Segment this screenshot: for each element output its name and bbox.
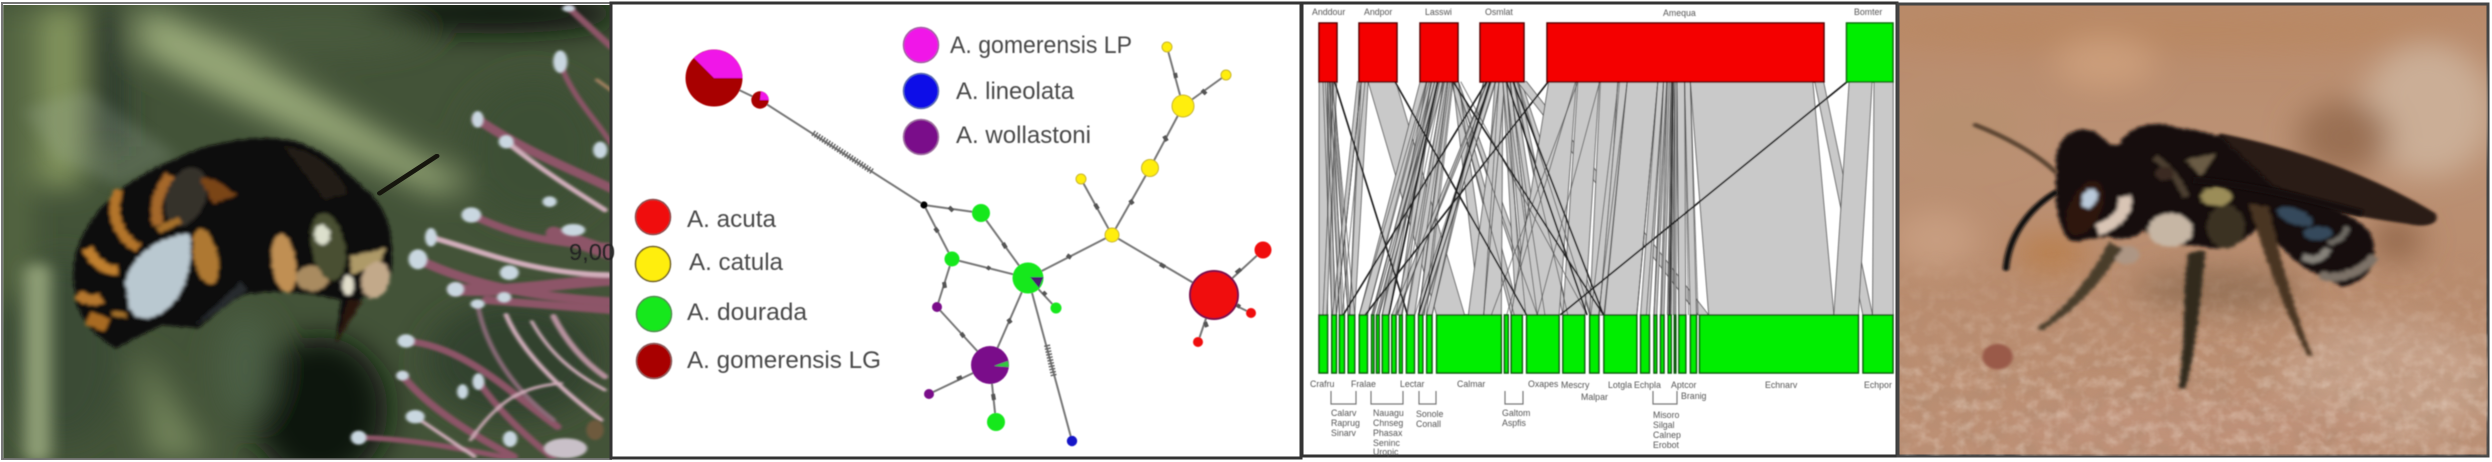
bottom labels: Chnseg [1373,418,1403,428]
nodes: A. catula [1076,42,1231,242]
interaction bands [1319,82,1893,315]
top plant/bee bars [1319,23,1893,82]
bottom labels: Echpor [1864,380,1892,390]
bottom labels: Aptcor [1671,380,1696,390]
bottom labels: Branig [1681,391,1707,401]
bottom labels: Uropic [1373,447,1399,457]
bottom labels: Calmar [1457,379,1485,389]
face [350,248,386,275]
bottom labels: Lectar [1400,379,1425,389]
grouping brackets [1331,391,1677,404]
legend: wollastoni [904,120,1091,154]
bottom labels: Galtom [1502,408,1530,418]
bottom labels: Malpar [1581,392,1608,402]
legend: gomerensis LG [636,344,881,378]
bottom labels: Seninc [1373,438,1400,448]
bee [2038,124,2375,388]
legend: catula [636,246,784,282]
bottom labels: Nauagu [1373,408,1404,418]
bottom labels: Raprug [1331,418,1360,428]
bottom labels: Lotgla [1608,380,1632,390]
bottom labels: Crafru [1310,379,1335,389]
photo background: blurred green foliage [3,0,621,462]
antenna [380,156,437,193]
photo background: blurred sandstone [1900,32,2488,456]
legend: gomerensis LG: A. gomerensis LG [687,347,881,374]
bottom labels: Oxapes [1528,379,1559,389]
top labels: Lasswi [1425,7,1452,17]
bottom labels: Conall [1416,419,1441,429]
bottom labels: Erobot [1653,440,1679,450]
legend: gomerensis LP: A. gomerensis LP [950,32,1132,59]
legend: acuta [636,200,777,234]
dark single-link lines [1334,82,1847,315]
bottom labels: Aspfis [1502,418,1527,428]
eye [306,211,350,282]
nodes: A. dourada [944,204,1062,431]
wing blur [24,90,178,187]
bottom labels: Echpla [1634,380,1661,390]
legend: catula: A. catula [689,249,784,276]
bottom labels: Sinarv [1331,428,1357,438]
legend: wollastoni: A. wollastoni [956,122,1091,149]
node: A. lineolata [1067,436,1077,446]
legend: acuta: A. acuta [687,206,777,233]
node: gomerensis large pie [686,50,742,106]
panel: flying bee photo [2,0,621,462]
top labels: Bomter [1854,7,1882,17]
node: junction [920,201,928,209]
top labels: Osmlat [1485,7,1513,17]
panel: haplotype network [611,3,1301,458]
bottom labels: Calnep [1653,430,1681,440]
panel: bee on rock photo [1852,4,2492,457]
legend: gomerensis LP [904,28,1132,62]
legend: lineolata [904,74,1075,108]
wing [2190,133,2437,226]
legend: dourada [636,296,808,332]
bottom labels: Silgal [1653,420,1675,430]
nodes: A. acuta [1190,242,1272,347]
top labels: Andpor [1364,7,1392,17]
network edges [714,47,1263,441]
node: gomerensis small pie [751,91,769,109]
legs [188,227,223,286]
nodes: A. wollastoni [924,302,942,399]
top labels [1312,7,1882,18]
legs [2038,242,2122,331]
bottom labels: Fralae [1351,379,1376,389]
top labels: Anddour [1312,7,1345,17]
hatched long branches [813,133,1054,377]
bottom labels: Mescry [1561,380,1590,390]
bottom labels: Echnarv [1765,380,1798,390]
panel: bipartite plant-pollinator web [1302,3,1897,457]
bottom labels: Calarv [1331,408,1357,418]
top labels: Amequa [1663,8,1696,18]
bottom labels: Misoro [1653,410,1680,420]
stray number label: 9,00 [569,239,615,265]
antennae [1975,125,2055,268]
wing vein [2193,180,2362,213]
flower filaments and anthers [359,8,611,458]
bottom labels [1310,379,1892,457]
bottom labels: Sonole [1416,409,1443,419]
legend: lineolata: A. lineolata [956,78,1075,105]
legend [636,28,1132,378]
mutation ticks [935,73,1241,400]
pollen load [126,233,191,318]
node: wollastoni pie [971,346,1009,384]
bottom species bars [1319,315,1893,373]
bee body [73,138,393,348]
bottom labels: Phasax [1373,428,1403,438]
legend: dourada: A. dourada [687,299,808,326]
node: dourada pie [1012,262,1044,294]
medium interaction lines [1323,82,1698,315]
